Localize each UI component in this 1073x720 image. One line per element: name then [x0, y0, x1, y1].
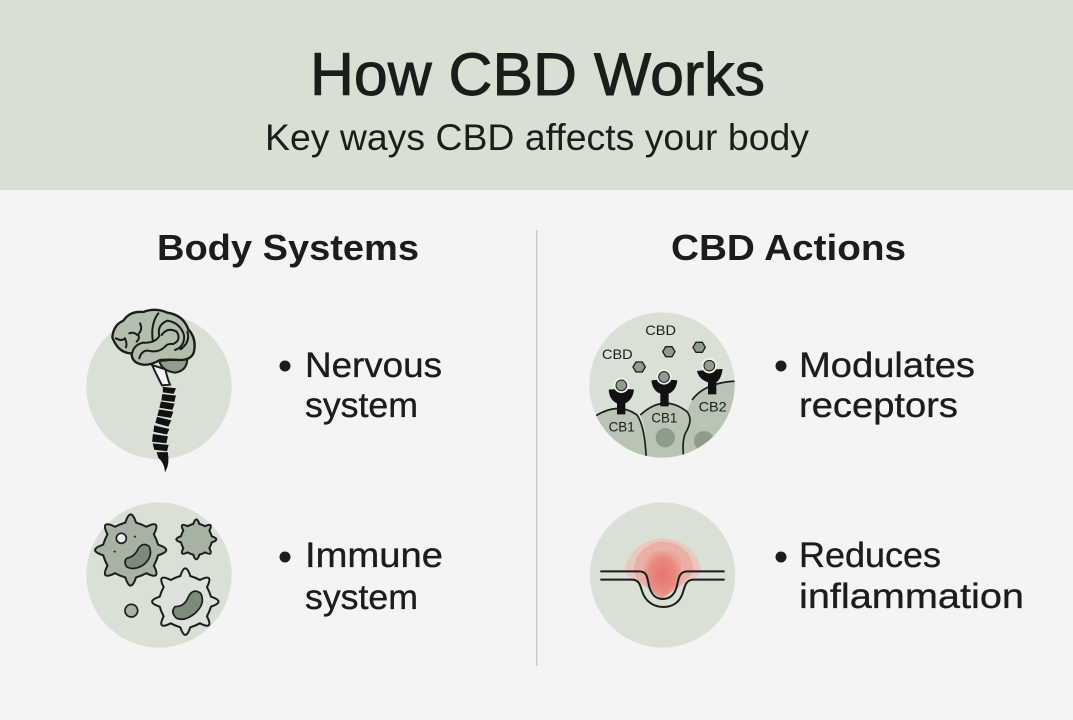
icon: receptors — [582, 312, 739, 462]
title: How CBD Works — [310, 41, 765, 108]
subtitle: Key ways CBD affects your body — [265, 117, 810, 158]
label: immune system: Immune — [305, 536, 443, 575]
icon: immune cells — [86, 502, 232, 648]
label: immune system — [280, 536, 443, 617]
column divider — [536, 230, 538, 666]
label: nervous system — [280, 346, 442, 425]
label: reduces inflammation: inflammation — [799, 577, 1024, 616]
label: immune system: system — [305, 578, 418, 617]
label: modulates receptors — [776, 346, 975, 425]
label: reduces inflammation — [776, 536, 1024, 616]
label: nervous system: system — [305, 386, 418, 425]
header band — [0, 0, 1073, 190]
icon: receptors: CBD — [602, 347, 633, 362]
icon: brain and spine — [86, 310, 232, 471]
label: nervous system: Nervous — [305, 346, 442, 385]
icon: receptors: CB1 — [651, 411, 677, 426]
icon: receptors: CB2 — [699, 399, 727, 414]
icon: receptors: CB1 — [609, 419, 635, 434]
heading: body systems: Body Systems — [157, 227, 419, 268]
label: modulates receptors: receptors — [799, 386, 958, 425]
icon: inflammation — [590, 502, 735, 648]
label: modulates receptors: Modulates — [799, 346, 975, 385]
label: reduces inflammation: Reduces — [799, 536, 941, 575]
icon: receptors: CBD — [645, 323, 676, 338]
heading: cbd actions: CBD Actions — [671, 227, 906, 268]
